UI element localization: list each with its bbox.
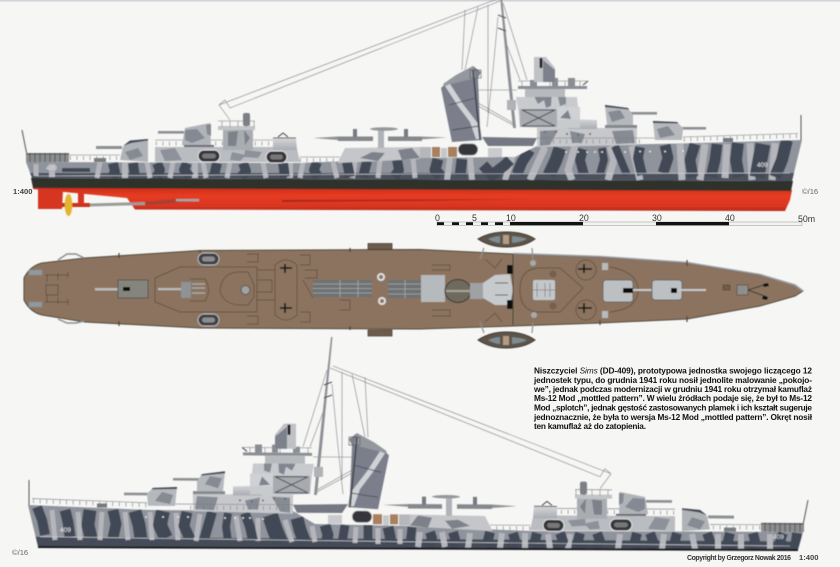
propeller [65,194,72,216]
boat deck markings [432,259,502,322]
torpedo tubes forward [388,280,421,298]
torpedo tubes aft [313,280,372,297]
funnel from above [421,275,483,302]
bottom keel line [38,547,798,550]
rigging [219,0,527,127]
raft cradles aft [198,150,287,163]
funnel [441,66,482,142]
plate number upper right: ©/16 [802,187,818,196]
bottom ship side view [20,335,810,554]
description text: Niszczyciel Sims (DD-409), prototypowa jednostka swojego liczącego 12 [534,366,812,376]
description text: jednoznacznie, że była to wersja Ms-12 Mod „mottled pattern”. Okręt nosił [533,412,813,422]
20mm wings forward [576,260,608,320]
scale bar outline [437,222,802,226]
bridge deckhouse [537,128,680,147]
description text: jednostek typu, do grudnia 1941 roku nosił jednolite malowanie „pokojo- [533,375,812,385]
top ship side view [20,0,810,216]
scale labels: 10 [506,213,516,223]
portholes bottom [146,517,263,519]
raft cradles deck [198,253,219,326]
deck hatches [247,254,350,324]
red lower hull [33,187,792,211]
scale labels: 30 [652,213,662,223]
scale note upper left: 1:400 [13,187,32,196]
description text: we”, jednak podczas modernizacji w grudniu 1941 roku otrzymał kamuflaż [533,384,812,394]
scale labels [435,213,815,224]
after platform [220,272,254,305]
superstructure and armament [22,0,801,163]
scale labels: 0 [435,213,440,223]
aft gun mount 5 [96,139,148,162]
scale bar segments [437,222,729,225]
scale labels: 50m [798,214,815,224]
portholes [566,151,683,152]
gun 1 [652,280,706,300]
life rings [378,274,385,304]
scale labels: 40 [725,213,735,223]
after deckhouse outline [155,267,257,312]
aft gun mount 4 [158,123,214,147]
bridge tub [568,119,597,129]
camouflaged hull [26,140,802,182]
stern depth charge racks [26,153,69,162]
after control platform [218,113,255,150]
starboard hull edge [513,254,803,291]
hull number bow: 409 [757,162,768,169]
keel detail [282,199,530,202]
deck plan view [24,232,803,348]
forward gun mount 1 [653,121,706,140]
torpedo tube mounts [313,127,447,163]
gun 2 [603,267,658,312]
description text: ten kamuflaż aż do zatopienia. [534,421,646,431]
20mm platform aft [275,260,297,320]
gun 4 [158,279,208,301]
jackstaff [800,115,802,140]
lifeboat upper [478,232,535,247]
scale labels: 5 [472,213,477,223]
mirrored superstructure [29,335,808,533]
boat racks at side [368,244,392,336]
deck shape [24,250,803,329]
bridge area white shape [483,254,513,325]
black boot topping [31,178,793,191]
aft deckhouse [155,140,300,162]
rail midships aft [300,157,340,160]
gun director [534,57,555,82]
hull number bow: 409 [60,527,71,534]
bow rail [683,134,798,142]
gun 5 [95,280,148,298]
stern deck fittings [45,272,68,305]
deck edge stanchions [119,248,687,330]
lifeboat lower [478,332,535,348]
midships details [420,144,502,158]
after tub [273,133,297,150]
plate number lower left: ©/16 [12,548,28,557]
bow fittings [723,283,769,300]
rudder [38,189,63,209]
description text [533,366,813,431]
description text: Mod „splotch”, jednak gęstość zastosowanych plamek i ich kształt sugeruje [534,402,812,412]
aft deck chocks [29,254,84,323]
hull number stern: 409 [46,165,57,172]
bridge tower [516,90,580,128]
bridge platform [518,78,588,97]
scale bar [435,213,815,226]
bottom hull camouflage [20,507,810,554]
stern flagstaff [22,130,27,155]
stern rail [69,155,120,162]
scale labels: 20 [579,213,589,223]
main mast [498,0,516,128]
copyright: Copyright by Grzegorz Nowak 2016 [687,555,791,562]
propeller shaft [62,191,199,207]
boat davits [480,248,533,333]
bottom hull base [28,505,803,550]
bridge plan [520,260,583,318]
description text: Ms-12 Mod „mottled pattern”. W wielu źródłach podaje się, że był to Ms-12 [534,393,812,403]
scale note lower right: 1:400 [799,553,818,562]
whaleboat [482,137,537,146]
hull number stern: 409 [773,534,784,541]
forward gun mount 2 [605,105,657,128]
